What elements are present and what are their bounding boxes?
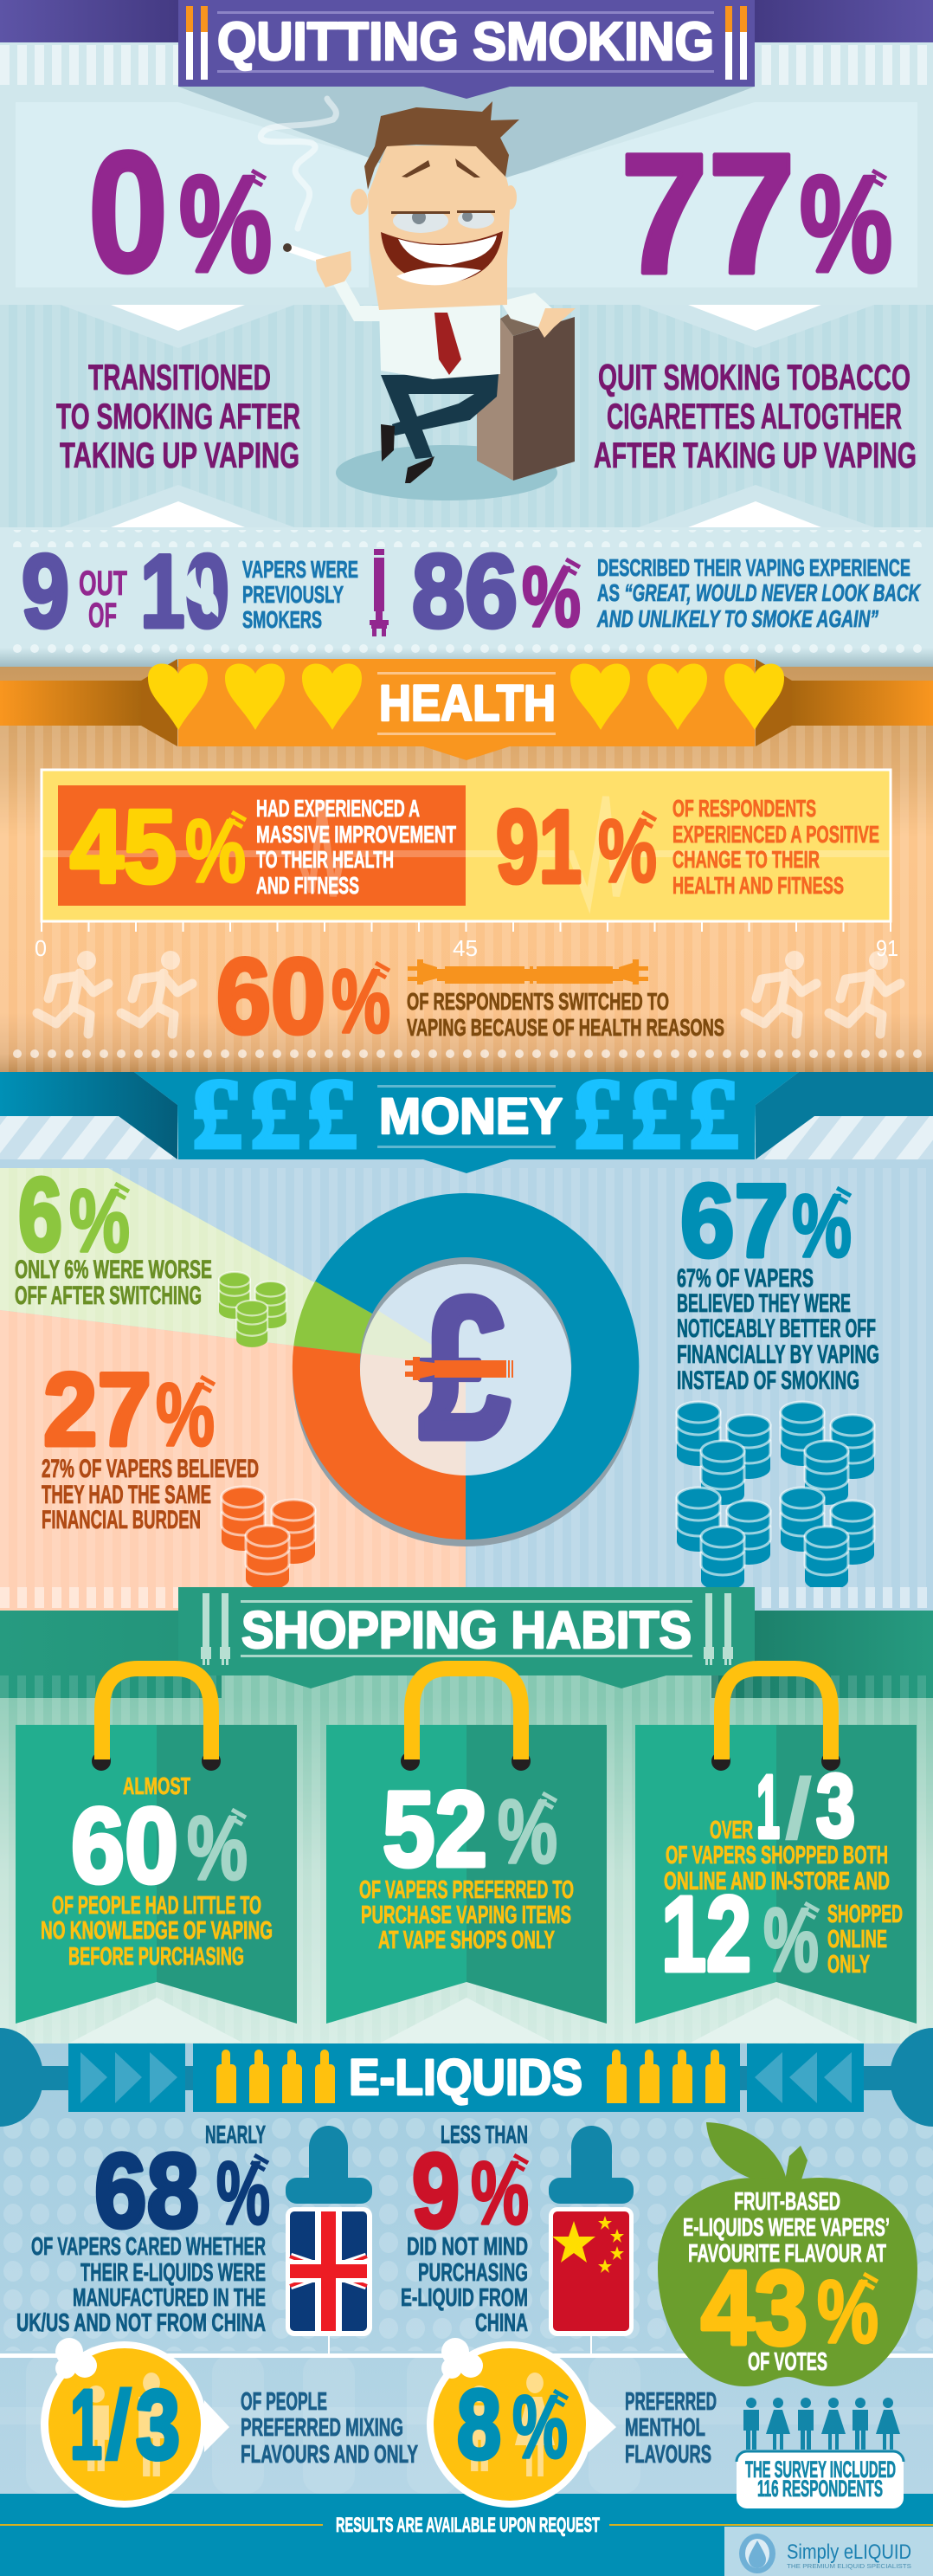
text: menthol: FLAVOURS (625, 2441, 711, 2469)
axis labels: 0 (35, 935, 47, 961)
text: vapers were previously smokers: VAPERS WERE (242, 556, 358, 583)
flag (552, 2211, 629, 2331)
stat: one third (756, 1756, 855, 1857)
text: same financial burden (42, 1455, 259, 1534)
text: quit smoking (594, 357, 917, 475)
text: massive improvement: HAD EXPERIENCED A (256, 795, 420, 822)
icons: runners (37, 951, 900, 1034)
text: worse off: ONLY 6% WERE WORSE (15, 1256, 212, 1284)
stat: 12 percent: 12 (661, 1876, 751, 1994)
stat: 52 percent (383, 1771, 557, 1889)
icons: pound signs (192, 1059, 739, 1170)
stat: 60 percent: 60 (71, 1787, 178, 1906)
icon: cigarettes left (186, 6, 208, 80)
callout: survey size (737, 2451, 904, 2508)
stat: 60 percent: % (331, 952, 390, 1052)
text: described their vaping experience (596, 554, 921, 632)
logo: Simply eLIQUID: THE PREMIUM ELIQUID SPECIALISTS (787, 2564, 911, 2570)
text: nearly: NEARLY (205, 2121, 266, 2149)
legs (381, 374, 499, 459)
stat: 9 out of 10: OUT (79, 565, 127, 603)
quitting smoking section background (0, 0, 933, 667)
icon: pound sign: £ (419, 1256, 510, 1481)
stat: one third: / (784, 1760, 813, 1857)
stat: 9 percent: % (471, 2143, 529, 2243)
stat: 60 percent: % (187, 1798, 248, 1899)
cloud (441, 2338, 483, 2379)
stat: 6 percent: 6 (18, 1157, 62, 1273)
text: switched because of health (407, 988, 724, 1041)
text: cared whether: THEIR E-LIQUIDS WERE (80, 2259, 266, 2287)
bag handle (92, 1669, 221, 1771)
stat: 43 percent: 43 (701, 2249, 808, 2366)
text: switched because of health: VAPING BECAUSE OF HEALTH REASONS (407, 1014, 724, 1041)
axis labels: 91 (876, 935, 898, 961)
icons: pound signs: £ (574, 1059, 624, 1170)
text: little knowledge: NO KNOWLEDGE OF VAPING (41, 1917, 273, 1945)
stat: 60 percent (216, 938, 390, 1056)
text: same financial burden: 27% OF VAPERS BELIEVED (42, 1455, 259, 1483)
stat (70, 2370, 180, 2481)
text: little knowledge (41, 1892, 273, 1971)
icon: blue coins (677, 1402, 874, 1591)
text: did not mind: DID NOT MIND (407, 2233, 528, 2261)
smoke (261, 99, 336, 229)
title: E-LIQUIDS (349, 2050, 582, 2106)
title: SHOPPING HABITS (241, 1601, 692, 1659)
icons: pound signs: £ (307, 1059, 357, 1170)
money section background (0, 1072, 933, 1591)
callout: 8 percent menthol (427, 2338, 616, 2508)
icon: green coins (219, 1272, 286, 1347)
apple with 43 percent (658, 2122, 917, 2386)
text: shopped both (664, 1842, 890, 1895)
axis labels (35, 935, 898, 961)
callout: one third mixing (41, 2338, 229, 2508)
text: same financial burden: FINANCIAL BURDEN (42, 1506, 201, 1534)
text: massive improvement (256, 795, 456, 899)
text: massive improvement: AND FITNESS (256, 872, 359, 899)
stat: / (104, 2370, 133, 2481)
panel: bag 3 over one third (635, 1669, 917, 2043)
text: transitioned: TRANSITIONED (88, 357, 271, 397)
stat: 9 out of 10: 9 (22, 533, 69, 649)
text: shopped online only (827, 1901, 903, 1979)
dot rows (9, 530, 926, 656)
text: prefer vape shops: AT VAPE SHOPS ONLY (378, 1927, 555, 1954)
stat: 12 percent: % (763, 1890, 819, 1991)
icons: pound signs: £ (250, 1059, 300, 1170)
stat: 43 percent (701, 2249, 878, 2366)
text: cared whether: UK/US AND NOT FROM CHINA (16, 2309, 266, 2337)
stat: 86 percent: % (522, 549, 581, 644)
pulse line (42, 797, 891, 901)
icon: China flag bottle (549, 2126, 634, 2355)
tie (434, 313, 461, 375)
bag handle (401, 1669, 531, 1771)
footer band (0, 2494, 933, 2576)
stat: 77 percent: % (800, 148, 892, 300)
stat: 91 percent: % (598, 801, 657, 901)
stat: 67 percent (680, 1163, 852, 1279)
text: transitioned (56, 357, 300, 475)
text: less than: LESS THAN (441, 2121, 528, 2149)
bar: 45 percent (58, 785, 466, 906)
text: prefer vape shops: PURCHASE VAPING ITEMS (361, 1901, 571, 1929)
stat: 67 percent: % (792, 1176, 852, 1275)
left sleeve (331, 280, 381, 321)
text: did not mind: CHINA (475, 2309, 528, 2337)
icons: pound signs: £ (689, 1059, 739, 1170)
text: little knowledge: BEFORE PURCHASING (68, 1943, 244, 1971)
text: better off: 67% OF VAPERS (677, 1264, 814, 1293)
text: positive change: CHANGE TO THEIR (672, 846, 820, 873)
icons: pound signs: £ (192, 1059, 242, 1170)
people silhouette (466, 2373, 555, 2476)
stat: 86 percent: 86 (412, 533, 518, 649)
panel: 45 and 91 percent chart (42, 770, 891, 921)
health section background (0, 667, 933, 1074)
icons: right arrows (755, 2052, 852, 2103)
stat: 91 percent: 91 (496, 789, 582, 905)
icons: pound signs: £ (631, 1059, 681, 1170)
stat: 0 percent: % (179, 148, 272, 300)
text: did not mind (401, 2233, 528, 2337)
text: fruit based (683, 2188, 890, 2268)
axis ticks (42, 921, 891, 932)
icons: left arrows (80, 2052, 177, 2103)
stat: one third: 1 (756, 1757, 780, 1856)
stat: 45 percent: 45 (70, 789, 177, 905)
bag handle (711, 1669, 840, 1771)
stat: 77 percent: 77 (621, 118, 795, 309)
illustration: smoking man leaning on box (261, 99, 576, 500)
shoes (381, 424, 434, 483)
flag (290, 2211, 367, 2331)
text: fruit based: FRUIT-BASED (734, 2188, 840, 2216)
icons: plug cables left (201, 1593, 230, 1665)
stat: 60 percent (71, 1787, 248, 1906)
text: almost: ALMOST (123, 1772, 190, 1799)
panel: bag 2 52 percent (326, 1669, 607, 2043)
text: worse off: OFF AFTER SWITCHING (15, 1282, 202, 1310)
axis labels: 45 (453, 935, 478, 961)
stat: 68 percent: % (216, 2143, 270, 2243)
text: positive change (672, 795, 879, 899)
text: worse off (15, 1256, 212, 1310)
icons: plug cables right (704, 1593, 733, 1665)
shopping section background (0, 1587, 933, 2043)
text: prefer vape shops: OF VAPERS PREFERRED TO (359, 1876, 574, 1904)
icon: UK flag bottle (286, 2126, 372, 2355)
stat: 3 (136, 2370, 180, 2479)
title: MONEY (379, 1088, 563, 1145)
text: cared whether: MANUFACTURED IN THE (73, 2284, 266, 2312)
text: mixing flavours: PREFERRED MIXING (241, 2414, 403, 2442)
dot row (9, 1045, 926, 1062)
stat (457, 2370, 568, 2479)
text: same financial burden: THEY HAD THE SAME (42, 1481, 211, 1509)
right sleeve (500, 293, 554, 327)
text: shopped online only: ONLY (827, 1951, 870, 1979)
mouth (381, 231, 503, 285)
leaf and stem (706, 2122, 808, 2191)
text: results: RESULTS ARE AVAILABLE UPON REQUEST (336, 2514, 600, 2537)
text: transitioned: TAKING UP VAPING (60, 435, 299, 475)
stat: 52 percent: 52 (383, 1771, 487, 1889)
stat: 60 percent: 60 (216, 938, 325, 1056)
logo: Simply eLIQUID: Simply eLIQUID (787, 2540, 911, 2564)
e-liquids section background (0, 2043, 933, 2502)
text: vapers were previously smokers (242, 556, 358, 633)
donut centre (346, 1264, 571, 1475)
text: of votes: OF VOTES (748, 2348, 827, 2376)
text: did not mind: E-LIQUID FROM (401, 2284, 528, 2312)
eyes (389, 204, 499, 233)
people silhouette (83, 2373, 164, 2476)
stat: 68 percent: 68 (94, 2132, 199, 2250)
stat: 0 percent: 0 (88, 116, 168, 307)
stat: one third: 3 (816, 1756, 855, 1856)
icons: bottles (216, 2050, 725, 2103)
text: massive improvement: TO THEIR HEALTH (256, 846, 394, 873)
hair (364, 101, 519, 190)
left hand (316, 251, 351, 287)
text: menthol: PREFERRED (625, 2388, 717, 2416)
head (351, 101, 519, 310)
donut chart (293, 1200, 639, 1546)
icon: vape double plug (408, 959, 648, 985)
stat: 43 percent: % (817, 2262, 878, 2361)
stat: 1 (70, 2370, 102, 2479)
stat: % (512, 2377, 568, 2476)
stat: 9 out of 10 (22, 533, 229, 649)
shadow (336, 445, 557, 500)
title: QUITTING SMOKING (217, 12, 714, 72)
logo icon (739, 2534, 775, 2573)
icons: respondents row (743, 2398, 900, 2450)
cloud (55, 2338, 97, 2379)
text: mixing flavours: FLAVOURS AND ONLY (241, 2441, 418, 2469)
stat: 8 (457, 2370, 501, 2479)
text: mixing flavours (241, 2388, 418, 2469)
text: shopped online only: ONLINE (827, 1926, 887, 1953)
stat: 9 percent: 9 (412, 2132, 460, 2250)
right hand (538, 308, 576, 338)
stat: 6 percent (18, 1157, 130, 1273)
text: over: OVER (710, 1817, 753, 1844)
text: did not mind: PURCHASING (418, 2259, 528, 2287)
stat: 9 out of 10: 10 (140, 533, 229, 649)
text: switched because of health: OF RESPONDENTS SWITCHED TO (407, 988, 669, 1015)
icon: vape plug divider (370, 549, 389, 636)
text: menthol: MENTHOL (625, 2414, 705, 2442)
text: prefer vape shops (359, 1876, 574, 1954)
stat: 67 percent: 67 (680, 1163, 788, 1279)
smoke cut-out in zero (183, 567, 218, 617)
stat: 45 percent (70, 789, 246, 905)
stat: 45 percent: % (185, 801, 246, 901)
stat: 27 percent: 27 (43, 1352, 151, 1468)
text: vapers were previously smokers: SMOKERS (242, 606, 322, 633)
text: positive change: HEALTH AND FITNESS (672, 872, 844, 899)
text: massive improvement: MASSIVE IMPROVEMENT (256, 821, 456, 848)
icon: vape plug (405, 1357, 513, 1380)
icon: orange coins (222, 1487, 315, 1590)
stat: 0 percent (88, 116, 272, 307)
logo: Simply eLIQUID (724, 2527, 933, 2576)
brows (402, 160, 430, 178)
stat: 9 out of 10: OF (88, 597, 117, 635)
decorative white triangles (111, 305, 821, 527)
stat: 27 percent (43, 1352, 215, 1468)
text: vapers were previously smokers: PREVIOUSLY (242, 581, 344, 608)
icon: cigarettes right (725, 6, 747, 80)
panel: bag 1 almost 60 percent (16, 1669, 297, 2043)
text: cared whether: OF VAPERS CARED WHETHER (31, 2233, 266, 2261)
stat: 52 percent: % (498, 1782, 557, 1882)
icons: hearts (148, 664, 784, 730)
segment: 27 percent orange (326, 1350, 466, 1506)
segment: 6 percent green (327, 1298, 344, 1350)
cigarette (283, 243, 331, 262)
text: little knowledge: OF PEOPLE HAD LITTLE TO (52, 1892, 261, 1920)
header banner: money (0, 1059, 933, 1173)
text: better off (677, 1264, 879, 1395)
header banner: quitting smoking (0, 0, 933, 99)
header banner: shopping habits (178, 1587, 755, 1688)
header banner: health (0, 659, 933, 760)
title: HEALTH (379, 675, 556, 732)
text: positive change: OF RESPONDENTS (672, 795, 816, 822)
text: transitioned: TO SMOKING AFTER (56, 396, 300, 436)
stat: 9 percent (412, 2132, 529, 2250)
text: menthol (625, 2388, 717, 2469)
segment: 67 percent blue (344, 1227, 605, 1506)
text: cared whether (16, 2233, 266, 2337)
stat: 27 percent: % (156, 1365, 215, 1464)
stat: 86 percent (412, 533, 581, 649)
header banner: e-liquids (0, 2028, 933, 2127)
box (477, 301, 575, 481)
stat: 68 percent (94, 2132, 270, 2250)
shirt (379, 299, 500, 379)
text: mixing flavours: OF PEOPLE (241, 2388, 327, 2416)
stat: 6 percent: % (69, 1171, 130, 1270)
